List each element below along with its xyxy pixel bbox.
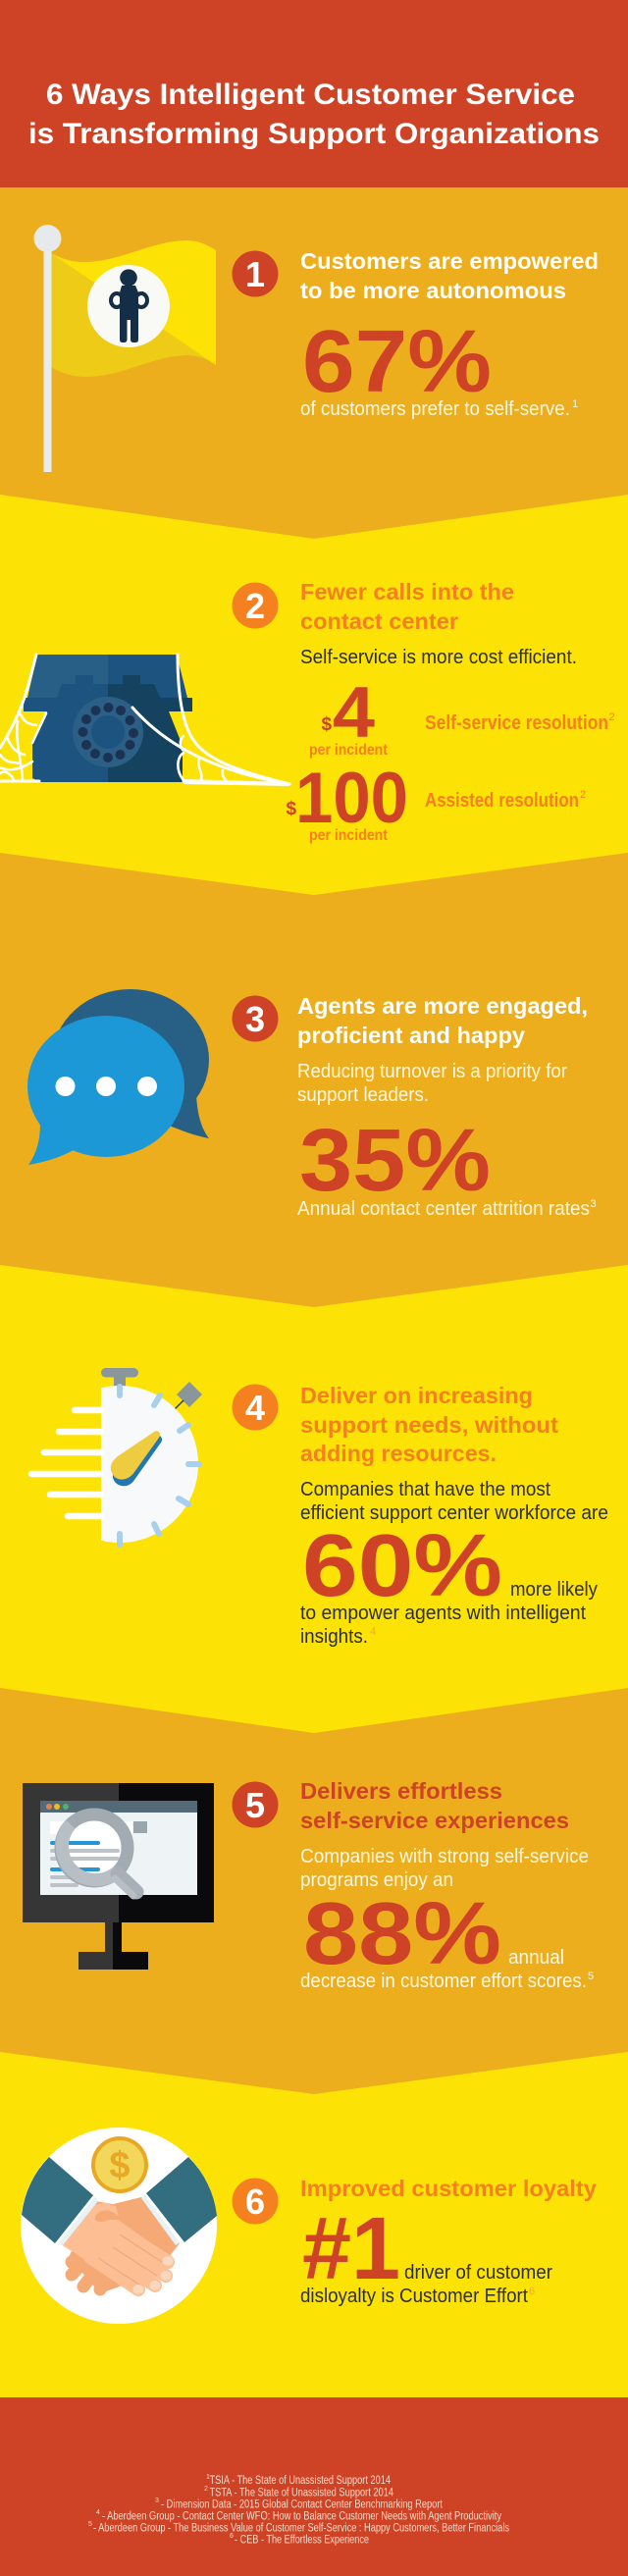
footer sources: 6 — [230, 2533, 234, 2540]
subhead: support leaders. — [297, 1084, 429, 1106]
stat caption: 5 — [588, 1971, 594, 1982]
footer sources: TSTA - The State of Unassisted Support 2014 — [210, 2487, 393, 2498]
footer sources: - CEB - The Effortless Experience — [235, 2534, 369, 2546]
footer sources: - Aberdeen Group - The Business Value of Customer Self-Service : Happy Customers, Better Financials — [93, 2522, 509, 2534]
heading 1: to be more autonomous — [300, 278, 566, 303]
subhead — [300, 1846, 589, 1891]
heading 3: proficient and happy — [297, 1023, 525, 1048]
title: is Transforming Support Organizations — [28, 118, 600, 150]
badge 6: 6 — [245, 2182, 265, 2222]
footer sources — [88, 2474, 509, 2546]
stat caption: Annual contact center attrition rates — [297, 1198, 590, 1220]
heading 6: Improved customer loyalty — [300, 2176, 597, 2201]
badge 3 — [232, 995, 279, 1042]
heading 4: Deliver on increasing — [300, 1383, 533, 1408]
badge 5: 5 — [245, 1785, 265, 1825]
panel: section 4 increasing support needs — [31, 1368, 608, 1648]
subhead: Companies that have the most — [300, 1479, 550, 1500]
stat caption: 1 — [572, 398, 578, 410]
badge 2: 2 — [245, 586, 265, 626]
heading 2: contact center — [300, 608, 458, 634]
heading 5: Delivers effortless — [300, 1778, 502, 1804]
badge 3: 3 — [245, 999, 265, 1039]
icon: speech bubbles — [27, 989, 209, 1165]
subhead: Self-service is more cost efficient. — [300, 647, 577, 668]
subhead: Companies with strong self-service — [300, 1846, 589, 1867]
badge 6 — [232, 2179, 279, 2224]
stat $4 self-service: $ — [322, 714, 332, 735]
stat $4 self-service: 4 — [333, 673, 375, 753]
stat $100 assisted: Assisted resolution — [425, 790, 579, 812]
footer sources: 2 — [204, 2486, 208, 2493]
stat $4 self-service: per incident — [309, 742, 389, 759]
stat $100 assisted: 100 — [295, 759, 408, 838]
panel: section 6 customer loyalty — [21, 2128, 597, 2324]
stat $100 assisted: $ — [287, 799, 296, 819]
subhead — [297, 1061, 567, 1106]
stat caption: insights. — [300, 1626, 368, 1648]
icon: handshake with coin: $ — [109, 2145, 131, 2186]
footer sources: 1 — [206, 2474, 210, 2481]
badge 5 — [232, 1782, 279, 1827]
stat $100 assisted — [287, 759, 586, 844]
stat $4 self-service — [309, 673, 615, 759]
panel: section 3 agents engaged — [27, 989, 597, 1220]
badge 1 — [232, 251, 279, 296]
panel: section 5 effortless self-service — [23, 1778, 594, 1992]
badge 4: 4 — [245, 1388, 265, 1428]
stat $4 self-service: 2 — [608, 711, 615, 723]
stat $100 assisted: per incident — [309, 827, 389, 844]
heading 2: Fewer calls into the — [300, 579, 514, 605]
stat caption: disloyalty is Customer Effort — [300, 2286, 528, 2307]
title — [28, 79, 600, 150]
stat caption: annual — [508, 1947, 564, 1969]
subhead: efficient support center workforce are — [300, 1502, 608, 1524]
heading 5 — [300, 1778, 569, 1833]
stat caption: to empower agents with intelligent — [300, 1603, 586, 1624]
heading 3: Agents are more engaged, — [297, 993, 588, 1019]
panel: section 2 fewer calls — [0, 579, 615, 844]
subhead: Reducing turnover is a priority for — [297, 1061, 567, 1082]
heading 4: adding resources. — [300, 1441, 497, 1466]
subhead: programs enjoy an — [300, 1869, 453, 1891]
heading 2 — [300, 579, 514, 634]
stat caption: 3 — [591, 1198, 597, 1210]
stat caption: driver of customer — [404, 2262, 552, 2284]
stat 60%: 60% — [302, 1517, 502, 1615]
stat caption — [300, 1947, 594, 1992]
footer sources: - Dimension Data - 2015 Global Contact Center Benchmarking Report — [161, 2498, 444, 2510]
footer sources: 5 — [88, 2521, 92, 2528]
footer sources: TSIA - The State of Unassisted Support 2014 — [210, 2475, 391, 2487]
stat caption: 6 — [529, 2286, 535, 2297]
icon: stopwatch — [31, 1368, 202, 1545]
stat caption: of customers prefer to self-serve. — [300, 398, 570, 420]
stat caption — [300, 1579, 598, 1648]
stat $100 assisted: 2 — [580, 789, 586, 801]
panel: section 1 customers empowered — [33, 225, 599, 472]
stat caption: more likely — [510, 1579, 598, 1601]
heading 4 — [300, 1383, 558, 1466]
icon: rotary phone with cobwebs — [0, 655, 289, 786]
badge 4 — [232, 1384, 279, 1431]
stat 88%: 88% — [303, 1885, 501, 1983]
badge 1: 1 — [245, 254, 265, 294]
heading 5: self-service experiences — [300, 1808, 569, 1833]
icon: flag with person — [33, 225, 216, 472]
stat 67%: 67% — [302, 313, 492, 411]
heading 4: support needs, without — [300, 1412, 558, 1438]
stat caption — [300, 2262, 552, 2307]
heading 1 — [300, 248, 599, 303]
title: 6 Ways Intelligent Customer Service — [46, 79, 575, 111]
footer sources: - Aberdeen Group - Contact Center WFO: How to Balance Customer Needs with Agent Productivity — [102, 2510, 501, 2522]
badge 2 — [232, 583, 279, 628]
subhead — [300, 1479, 608, 1524]
stat caption: 4 — [370, 1626, 376, 1638]
heading 1: Customers are empowered — [300, 248, 599, 274]
stat caption: decrease in customer effort scores. — [300, 1971, 587, 1992]
stat 35%: 35% — [299, 1112, 491, 1210]
icon: monitor with magnifier — [23, 1783, 214, 1970]
footer sources: 3 — [155, 2497, 159, 2504]
footer sources: 4 — [96, 2509, 100, 2516]
icon: handshake with coin — [21, 2128, 217, 2324]
stat #1: #1 — [302, 2200, 400, 2298]
heading 3 — [297, 993, 588, 1048]
